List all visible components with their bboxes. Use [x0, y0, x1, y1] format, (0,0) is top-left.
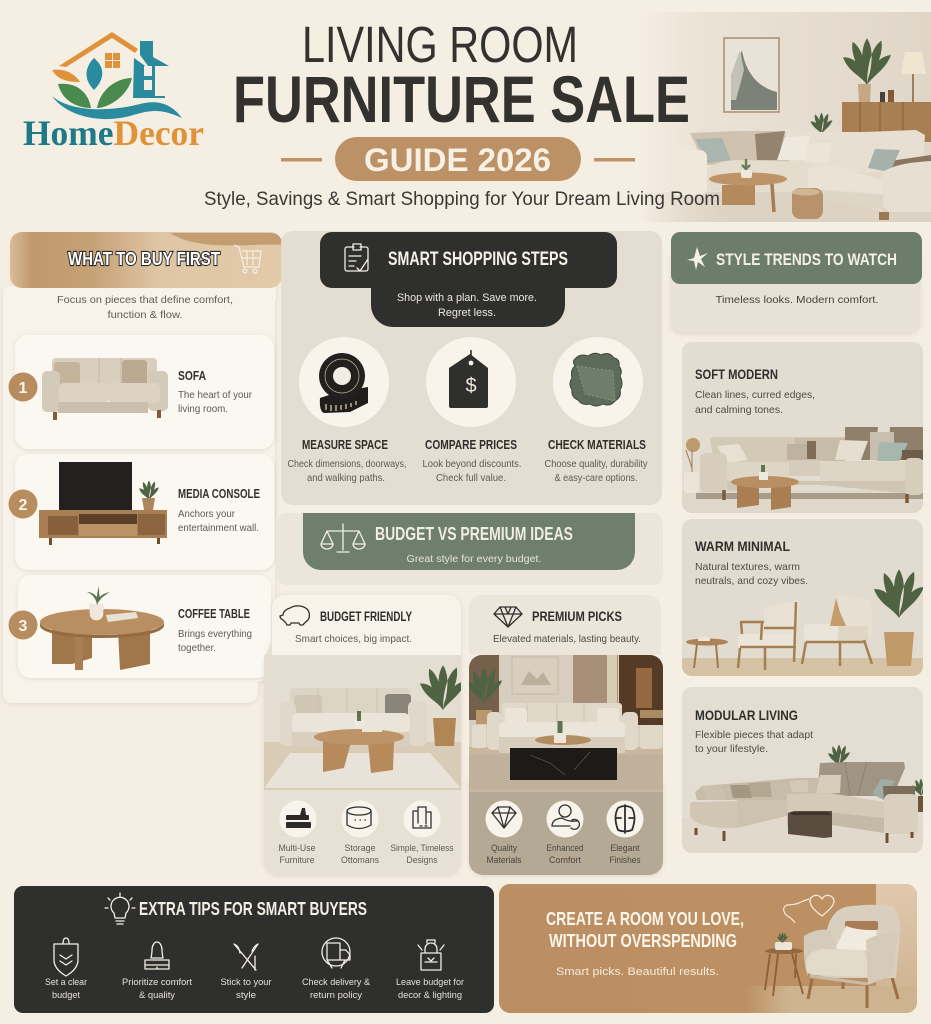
- icon: window: [105, 53, 120, 68]
- text: soft modern: [695, 366, 815, 416]
- sofa: [487, 703, 638, 753]
- tip: check delivery: [302, 938, 371, 1001]
- card: sofa: [8, 335, 274, 449]
- icon: tower windows: [144, 66, 152, 90]
- labels: budget features: Storage: [344, 843, 376, 854]
- icon: cart: [234, 245, 261, 273]
- badge: guide 2026: GUIDE 2026: [364, 142, 551, 178]
- heading: smart shopping steps: Shop with a plan. Save more.: [397, 292, 537, 304]
- card: modular living: [682, 687, 930, 853]
- panel: what to buy first: [3, 232, 282, 703]
- step: compare prices: COMPARE PRICES: [425, 437, 517, 452]
- labels: premium features: Quality: [491, 843, 517, 854]
- label: sofa: The heart of your: [178, 389, 252, 401]
- text: warm minimal: neutrals, and cozy vibes.: [695, 575, 808, 587]
- text: warm minimal: Natural textures, warm: [695, 561, 800, 573]
- labels: premium features: Comfort: [549, 855, 581, 866]
- logo: HomeDecor: [23, 32, 204, 153]
- text: soft modern: Clean lines, curred edges,: [695, 389, 815, 401]
- label: coffee table: Brings everything: [178, 628, 252, 640]
- banner text: CREATE A ROOM YOU LOVE,: [546, 909, 744, 929]
- banner text: Smart picks. Beautiful results.: [556, 966, 719, 978]
- plant on cabinet: [843, 38, 891, 102]
- panel: smart shopping steps: [281, 231, 662, 505]
- text: soft modern: SOFT MODERN: [695, 366, 778, 382]
- icon: house walls: [133, 41, 169, 98]
- heading: what to buy first: [10, 232, 282, 288]
- heading: smart shopping steps: [320, 232, 617, 327]
- labels: budget features: [278, 843, 454, 866]
- chair one: [738, 600, 799, 670]
- step: compare prices: Look beyond discounts.: [422, 458, 522, 470]
- label: media console: MEDIA CONSOLE: [178, 486, 260, 501]
- small plant behind sofa: [810, 113, 832, 134]
- label: coffee table: together.: [178, 642, 216, 654]
- labels: budget features: Ottomans: [341, 855, 379, 866]
- labels: budget features: Multi-Use: [278, 843, 316, 854]
- tip: prioritize comfort: Prioritize comfort: [122, 977, 192, 988]
- label: coffee table: [178, 606, 252, 654]
- label: media console: [178, 486, 260, 534]
- heading: budget vs premium ideas: [303, 513, 635, 570]
- panel: style trends: Timeless looks. Modern comfort.: [716, 294, 878, 306]
- heading: style trends to watch: [671, 232, 922, 284]
- labels: premium features: Elegant: [610, 843, 640, 854]
- side table: [686, 637, 728, 668]
- tip: stick to your style: Stick to your: [220, 977, 272, 988]
- photo: premium living room: [466, 655, 663, 792]
- step: measure space: and walking paths.: [307, 472, 385, 484]
- step: compare prices: Check full value.: [436, 472, 506, 484]
- labels: premium features: Materials: [486, 855, 522, 866]
- subtitle: Style, Savings & Smart Shopping for Your Dream Living Room: [204, 188, 720, 210]
- step: compare prices: [422, 337, 522, 484]
- labels: premium features: Enhanced: [546, 843, 584, 854]
- icons: premium features: [486, 800, 644, 838]
- tip: stick to your style: style: [236, 990, 256, 1001]
- icon: sparkle: [687, 247, 708, 270]
- wall art: [724, 38, 779, 112]
- title: [233, 16, 690, 136]
- card: coffee table: [8, 575, 271, 678]
- coffee table: [314, 711, 404, 773]
- icon: fabric swatch: [570, 353, 622, 406]
- coffee table: [731, 465, 799, 510]
- chair two: [802, 595, 872, 666]
- card: premium picks: [466, 595, 663, 875]
- card: warm minimal: [682, 519, 924, 676]
- label: sofa: living room.: [178, 403, 228, 415]
- card: budget friendly: Smart choices, big impact.: [295, 633, 412, 645]
- icons: budget features: [280, 800, 440, 838]
- card: premium picks: Elevated materials, lasting beauty.: [493, 633, 641, 645]
- tip: check delivery: return policy: [310, 990, 362, 1001]
- tip: stick to your style: [220, 944, 272, 1001]
- heading: budget vs premium ideas: Great style for every budget.: [406, 553, 542, 565]
- step: check materials: Choose quality, durability: [544, 458, 648, 470]
- heading: extra tips: [105, 893, 367, 924]
- sectional sofa: [670, 130, 931, 220]
- icon: tape measure: [319, 353, 368, 413]
- labels: premium features: [486, 843, 641, 866]
- labels: budget features: Simple, Timeless: [390, 843, 454, 854]
- title: FURNITURE SALE: [233, 62, 690, 136]
- text: modular living: Flexible pieces that adapt: [695, 729, 813, 741]
- heading: budget vs premium ideas: BUDGET VS PREMIUM IDEAS: [375, 524, 573, 544]
- tip: leave budget: decor & lighting: [398, 990, 462, 1001]
- icon: scales: [321, 524, 365, 552]
- text: warm minimal: [695, 538, 808, 587]
- tip: prioritize comfort: [122, 942, 192, 1001]
- icon: green leaves: [58, 78, 132, 108]
- icon: price tag: [449, 350, 488, 408]
- step: measure space: [288, 337, 406, 484]
- icon: diamond: [494, 607, 522, 627]
- illustration: round coffee table: [40, 586, 164, 670]
- step: measure space: Check dimensions, doorways,: [288, 458, 406, 470]
- label: media console: Anchors your: [178, 508, 235, 520]
- icon: orange leaf: [52, 70, 80, 82]
- vase: [684, 438, 700, 493]
- plant: [466, 668, 502, 748]
- icon: number 2: [8, 490, 38, 518]
- card: premium picks: PREMIUM PICKS: [532, 609, 622, 624]
- icon: house roof: [59, 32, 138, 67]
- title: LIVING ROOM: [302, 16, 578, 73]
- card: budget friendly: BUDGET FRIENDLY: [320, 609, 412, 624]
- intro text: [57, 294, 233, 321]
- heading: smart shopping steps: SMART SHOPPING STEPS: [388, 249, 568, 270]
- step: measure space: MEASURE SPACE: [302, 437, 388, 452]
- text: modular living: MODULAR LIVING: [695, 707, 798, 723]
- round table and stool: [709, 159, 823, 219]
- icon: number 1: 1: [19, 380, 28, 397]
- icon: price tag: $: [465, 375, 477, 397]
- text: modular living: to your lifestyle.: [695, 743, 768, 755]
- heading: smart shopping steps: Regret less.: [438, 307, 496, 319]
- lamp: [901, 52, 926, 102]
- labels: budget features: Designs: [406, 855, 438, 866]
- icon: number 2: 2: [19, 497, 28, 514]
- card: soft modern: [682, 342, 923, 513]
- intro text: function & flow.: [108, 309, 182, 321]
- card: budget friendly: [264, 595, 466, 875]
- text: modular living: [695, 707, 813, 755]
- illustration: tv on console: [39, 462, 167, 545]
- panel: extra tips: [14, 886, 494, 1013]
- label: sofa: SOFA: [178, 368, 206, 383]
- label: sofa: [178, 368, 252, 415]
- icon: piggy bank: [280, 606, 309, 625]
- ottoman: [788, 811, 832, 838]
- card: media console: [8, 454, 274, 570]
- heading: extra tips: EXTRA TIPS FOR SMART BUYERS: [139, 899, 367, 919]
- heading: what to buy first: WHAT TO BUY FIRST: [68, 249, 220, 269]
- icon: number 3: [8, 610, 38, 640]
- tip: check delivery: Check delivery &: [302, 977, 371, 988]
- labels: budget features: Furniture: [280, 855, 314, 866]
- marble table: [510, 721, 617, 780]
- label: media console: entertainment wall.: [178, 522, 259, 534]
- heart doodle: [784, 895, 834, 923]
- intro text: Focus on pieces that define comfort,: [57, 294, 233, 306]
- step: check materials: & easy-care options.: [554, 472, 638, 484]
- icon: clipboard: [345, 244, 368, 271]
- panel: style trends: [671, 232, 922, 333]
- labels: premium features: Finishes: [610, 855, 641, 866]
- logo wordmark: HomeDecor: [23, 113, 204, 153]
- icon: wave: [52, 96, 182, 119]
- tip: prioritize comfort: & quality: [139, 990, 175, 1001]
- text: warm minimal: WARM MINIMAL: [695, 538, 790, 554]
- panel: budget vs premium: [277, 513, 663, 585]
- badge: guide 2026: [281, 137, 635, 181]
- sofa: [280, 688, 427, 746]
- plant: [420, 665, 461, 746]
- armchair: [804, 905, 900, 1008]
- plants: [828, 745, 930, 812]
- banner text: [546, 909, 744, 978]
- tip: leave budget: Leave budget for: [396, 977, 464, 988]
- tip: set a clear budget: [45, 938, 87, 1001]
- modular sectional: [690, 762, 918, 843]
- header photo: living room: [640, 12, 931, 222]
- banner: create a room you love: [499, 884, 917, 1013]
- tip: leave budget: [396, 940, 464, 1001]
- step: check materials: CHECK MATERIALS: [548, 437, 646, 452]
- illustration: two-seat sofa: [42, 358, 168, 420]
- banner text: WITHOUT OVERSPENDING: [549, 931, 737, 951]
- potted plant: [874, 569, 924, 666]
- sectional sofa: [696, 427, 923, 503]
- icon: number 3: 3: [19, 618, 28, 635]
- icon: number 1: [8, 372, 38, 402]
- tip: set a clear budget: budget: [52, 990, 80, 1001]
- side stools: [640, 710, 663, 749]
- step: check materials: [544, 337, 648, 484]
- cabinet: [842, 90, 931, 142]
- text: soft modern: and calming tones.: [695, 404, 783, 416]
- side table with plant: [765, 932, 803, 996]
- photo: budget living room: [264, 655, 466, 790]
- icon: teal leaf: [86, 58, 102, 90]
- label: coffee table: COFFEE TABLE: [178, 606, 250, 621]
- tip: set a clear budget: Set a clear: [45, 977, 87, 988]
